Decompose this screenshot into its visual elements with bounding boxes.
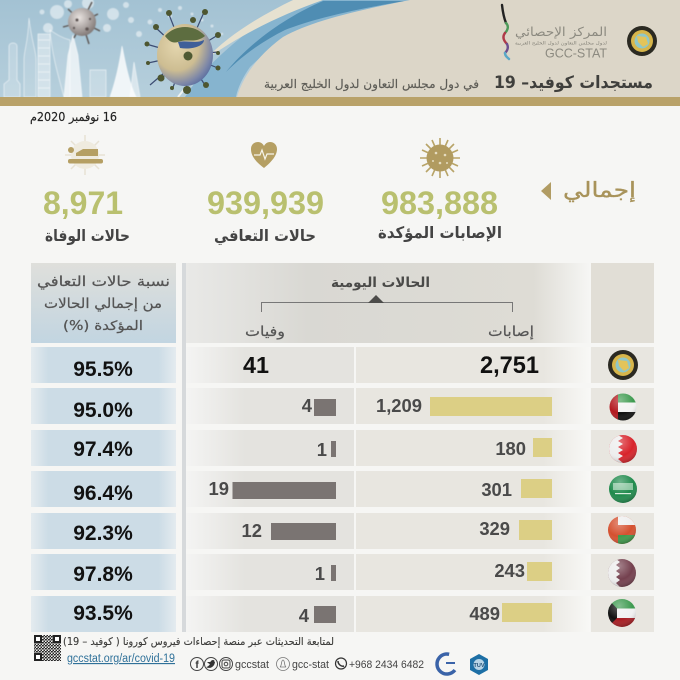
row: Oman: 92.3%: [73, 522, 133, 545]
total heading: إجمالي: [563, 178, 636, 203]
row: Oman: [31, 513, 654, 549]
gold band: [0, 97, 680, 106]
row: Saudi Arabia: [31, 471, 654, 507]
title: مستجدات كوفيد– 19: [494, 73, 653, 93]
panel: recovery rate header: [31, 263, 176, 343]
number: 939,939: [207, 185, 324, 221]
panel: daily cases header: [186, 263, 590, 343]
icons: social media: f: [195, 660, 199, 671]
row: Kuwait: 4: [299, 605, 310, 626]
row: Saudi Arabia: 301: [481, 479, 512, 500]
row: Qatar: 1: [315, 563, 325, 584]
handle: gcc-stat: gcc-stat: [292, 659, 329, 671]
table: [31, 263, 654, 632]
panel: recovery rate header: نسبة حالات التعافي: [37, 274, 170, 290]
logo: TUV: TUV: [474, 663, 485, 669]
number: 8,971: [43, 185, 123, 221]
logo ribbon: [502, 5, 509, 59]
icons: social media: [190, 658, 232, 671]
icon: heart with pulse: [251, 142, 277, 168]
logo: GCC-STAT: [502, 5, 607, 60]
row: Qatar: [31, 554, 654, 590]
row: Qatar: 97.8%: [73, 563, 133, 586]
row: GCC total: [31, 347, 654, 383]
icon: virus: [420, 138, 460, 178]
row: Kuwait: 93.5%: [73, 602, 133, 625]
handle: gccstat: gccstat: [235, 659, 269, 671]
icon: UAE flag: [609, 393, 637, 421]
row: Qatar: 243: [494, 560, 525, 581]
row: GCC total: 41: [243, 352, 269, 378]
logo: GCC emblem: [627, 26, 657, 56]
logo name text: المركز الإحصائي: [515, 24, 607, 40]
icon: patient in bed: [65, 135, 105, 175]
row: Kuwait: 489: [469, 603, 500, 624]
row: GCC total: 95.5%: [73, 358, 133, 381]
icon: Bahrain flag: [609, 435, 637, 463]
stat: recoveries: [207, 142, 324, 246]
column separator: [182, 263, 186, 632]
row: Bahrain: 1: [317, 439, 327, 460]
row: UAE: 95.0%: [73, 399, 133, 422]
label: حالات الوفاة: [45, 226, 130, 245]
row: Saudi Arabia: 19: [209, 478, 229, 499]
row: Oman: 12: [242, 520, 262, 541]
illustration: city skyline: [4, 18, 140, 97]
logo tagline: لدول مجلس التعاون لدول الخليج العربية: [515, 42, 607, 46]
icon: Saudi flag: [609, 475, 637, 503]
label: الإصابات المؤكدة: [378, 223, 502, 242]
row: Saudi Arabia: 96.4%: [73, 482, 133, 505]
icon: Oman flag: [608, 516, 636, 544]
row: Bahrain: 97.4%: [73, 438, 133, 461]
panel: daily cases header: وفيات: [245, 324, 285, 340]
stat: confirmed cases: [378, 138, 502, 242]
row: Bahrain: [31, 430, 654, 466]
stat: deaths: [43, 135, 130, 245]
panel: recovery rate header: المؤكدة (%): [63, 319, 143, 334]
row: UAE: [31, 388, 654, 424]
bracket: [262, 295, 512, 312]
logo latin name: GCC-STAT: [545, 46, 607, 60]
date: 16 نوفمبر 2020م: [30, 110, 117, 125]
icon: Kuwait flag: [608, 599, 636, 627]
row: UAE: 4: [302, 395, 313, 416]
panel: recovery rate header: من إجمالي الحالات: [44, 296, 162, 312]
subtitle: في دول مجلس التعاون لدول الخليج العربية: [264, 77, 479, 92]
row: UAE: 1,209: [376, 395, 422, 416]
follow text: لمتابعة التحديثات عبر منصة إحصاءات فيروس كورونا ( كوفيد – 19): [63, 636, 334, 648]
link: gccstat.org/ar/covid-19: [67, 653, 175, 665]
panel: daily cases header: إصابات: [488, 324, 534, 340]
row: Bahrain: 180: [495, 438, 526, 459]
footer: [34, 635, 488, 678]
row: Kuwait: [31, 596, 654, 632]
illustration: grey virus: [63, 2, 100, 44]
icon: snapchat: [276, 658, 290, 670]
total heading: [541, 178, 636, 203]
swoosh curves: [178, 0, 680, 97]
row: Oman: 329: [479, 518, 510, 539]
icon: Qatar flag: [608, 559, 636, 587]
illustration: bubbles: [40, 0, 223, 37]
logo: certification: [433, 650, 461, 678]
illustration: coronavirus globe: [144, 9, 221, 94]
number: 983,888: [381, 185, 498, 221]
icon: whatsapp: [336, 658, 346, 669]
QR code: [34, 635, 61, 661]
header banner: [0, 0, 680, 106]
panel: flag header: [591, 263, 654, 343]
logo: TUV: [470, 654, 488, 675]
panel: daily cases header: الحالات اليومية: [331, 275, 430, 291]
label: حالات التعافي: [214, 226, 316, 246]
icon: GCC emblem: [608, 350, 638, 380]
phone number: +968 2434 6482: [349, 659, 424, 671]
row: GCC total: 2,751: [480, 353, 539, 379]
arrow: [541, 182, 551, 200]
